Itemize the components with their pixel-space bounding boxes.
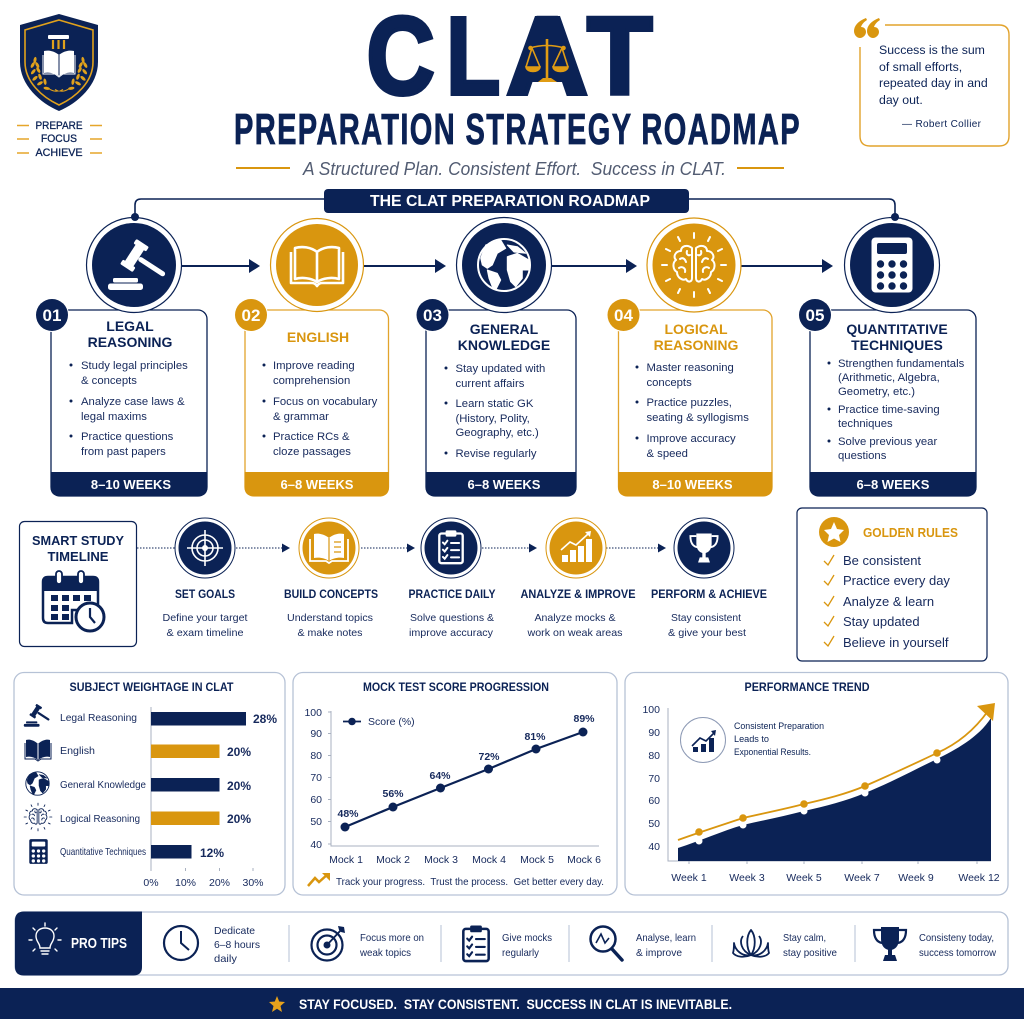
roadmap banner: THE CLAT PREPARATION ROADMAP [370,193,650,210]
timeline step: perform and achieve [651,518,767,639]
bar chart: Logical Reasoning [60,813,140,825]
bullet list: Practice questions [81,431,174,443]
bullet list: Focus on vocabulary [273,396,378,408]
timeline step: analyze and improve: Analyze mocks & [534,612,616,624]
line chart: Mock 5 [520,854,554,866]
area chart: 80 [648,750,660,762]
bar chart: 12% [200,846,224,860]
bar chart: 30% [242,877,264,889]
icon: gavel [86,213,182,312]
checklist: Be consistent [843,553,921,568]
line chart: Mock 4 [472,854,506,866]
callout: growth note [680,718,824,762]
card title [88,318,172,350]
footer banner [0,988,1024,1019]
timeline connectors [137,544,666,552]
badge: 03 [416,298,450,332]
checklist: Stay updated [843,614,920,629]
panel: mock test score progression [293,672,617,895]
bullet list: Practice time-saving [838,404,940,416]
area chart: 70 [648,773,660,785]
bar chart: 20% [227,812,251,826]
bullet list: Strengthen fundamentals [838,358,965,370]
timeline step: practice daily: Solve questions & [410,612,494,624]
tip: weak topics: Focus more on [360,932,424,944]
tip: daily hours [164,925,260,965]
bar chart: 10% [175,877,196,889]
card title: REASONING [654,337,738,353]
timeline step: practice daily [408,518,496,639]
bullet list: & concepts [81,375,137,387]
line chart: 81% [524,731,546,743]
card title: KNOWLEDGE [458,337,550,353]
area chart: 100 [642,704,660,716]
footer: duration [426,472,576,496]
area chart: Week 3 [729,872,765,884]
icon: checklist [421,518,481,578]
tip: calm: stay positive [783,947,837,959]
bullet list [828,358,965,462]
bullet list: (History, Polity, [456,413,530,425]
badge: 04: 04 [614,306,633,325]
tip: calm [733,930,837,959]
panel: english [244,310,389,496]
badge: 05 [798,298,832,332]
bullet list [636,362,749,460]
panel: subject weightage [14,672,285,895]
line chart: 72% [478,751,500,763]
footer: duration [810,472,976,496]
logo: shield crest with motto [17,14,102,159]
icon: globe [456,218,552,312]
icon: target [175,518,235,578]
motto [17,120,102,159]
card title [846,321,948,353]
line chart [304,707,601,866]
area chart: Week 9 [898,872,934,884]
bar chart: 20% [227,779,251,793]
panel: quantitative techniques [810,310,976,496]
timeline step: set goals: Define your target [162,612,248,624]
subject icons [24,704,53,864]
checklist: Believe in yourself [843,635,949,650]
line chart: 100 [304,707,322,719]
line chart: 48% [337,808,359,820]
bullet list: Study legal principles [81,360,188,372]
tip: consistency [874,927,996,961]
footer: duration: 8–10 WEEKS [91,477,171,492]
line chart: 40 [310,839,322,851]
timeline step: analyze and improve: ANALYZE & IMPROVE [520,589,636,601]
panel: golden rules [797,508,987,661]
tip: daily hours: Dedicate [214,925,255,937]
card title [458,321,550,353]
footer: duration [50,472,208,496]
line chart: 90 [310,728,322,740]
bullet list: cloze passages [273,446,351,458]
area chart: 90 [648,727,660,739]
bullet list: Improve accuracy [646,433,736,445]
panel: performance trend [625,672,1008,895]
badge: 03: 03 [423,306,442,325]
bullet list: Master reasoning [646,362,734,374]
area chart [642,703,1000,884]
bullet list: legal maxims [81,411,147,423]
icon: scales of justice [526,39,568,82]
footer: duration [618,472,772,496]
tip: weak topics: weak topics [359,947,411,959]
line chart: 50 [310,816,322,828]
bullet list: concepts [646,377,692,389]
motto: FOCUS [41,133,77,145]
area chart: Week 7 [844,872,880,884]
line chart: 80 [310,750,322,762]
bullet list: current affairs [456,378,525,390]
icon: trophy [674,518,734,578]
footer: duration: 8–10 WEEKS [652,477,733,492]
bullet list: Stay updated with [456,363,545,375]
callout: growth note: Leads to [734,734,769,744]
badge: 02 [234,298,268,332]
badge: 01 [35,298,69,332]
panel: smart study timeline: SMART STUDY [32,533,124,548]
tip: calm: Stay calm, [783,932,826,944]
badge: 02: 02 [242,306,260,325]
icon: calendar and clock [43,571,104,631]
bullet list: Analyze case laws & [81,396,185,408]
panel: performance trend: PERFORMANCE TREND [744,682,870,694]
card title: GENERAL [470,321,539,337]
area chart: Week 1 [671,872,707,884]
timeline step: build concepts: & make notes [298,627,362,639]
bullet list: questions [838,450,887,462]
title: CLAT [366,0,652,118]
timeline step: practice daily: improve accuracy [409,627,494,639]
card title: LEGAL [106,318,154,334]
icon: growth chart [546,518,606,578]
line chart: Mock 6 [567,854,601,866]
area chart: Week 12 [958,872,1000,884]
bullet list: Revise regularly [456,448,537,460]
footer: duration: 6–8 WEEKS [468,477,541,492]
panel: mock test score progression: MOCK TEST SCORE PROGRESSION [363,682,549,694]
bar chart: General Knowledge [60,779,146,791]
tip: mocks: Give mocks [502,932,552,944]
icon: star badge [819,517,849,547]
checklist: Analyze & learn [843,594,934,609]
bullet list: seating & syllogisms [646,412,749,424]
panel: smart study timeline: TIMELINE [48,549,109,564]
icon: brain [647,218,741,312]
line chart: Mock 3 [424,854,458,866]
line chart: Mock 1 [329,854,363,866]
bullet list: techniques [838,418,893,430]
footer note: Track your progress. Trust the process. Get better every day. [336,876,604,888]
timeline step: analyze and improve [520,518,636,639]
area chart: Week 5 [786,872,822,884]
area chart: 60 [648,795,660,807]
footer: duration [244,472,389,496]
card title: QUANTITATIVE [846,321,948,337]
bullet list: Improve reading [273,360,355,372]
card title: ENGLISH [287,329,349,345]
tip: analyse [590,926,696,960]
timeline step: build concepts: Understand topics [287,612,373,624]
bar chart: 20% [209,877,230,889]
bullet list [444,363,545,460]
bullet list: comprehension [273,375,350,387]
bar chart [60,707,277,889]
panel: general knowledge [426,310,576,496]
checklist [824,553,950,650]
panel: logical reasoning [618,310,772,496]
card title: TECHNIQUES [851,337,943,353]
bar chart: 0% [143,877,159,889]
bar chart: Quantitative Techniques [60,846,146,858]
line chart: 60 [310,794,322,806]
tip: daily hours: 6–8 hours [214,939,260,951]
callout: quote: repeated day in and [879,76,988,90]
timeline step: perform and achieve: & give your best [668,627,746,639]
bar chart: Legal Reasoning [60,712,137,724]
callout: quote: Success is the sum [879,43,985,57]
tip: analyse: Analyse, learn [636,932,696,944]
heading: preparation strategy roadmap: PREPARATION STRATEGY ROADMAP [234,104,800,153]
legend: Score (%) [368,716,415,728]
line chart: 89% [573,713,595,725]
line chart: 56% [382,788,404,800]
bullet list: (Arithmetic, Algebra, [838,372,940,384]
tip: weak topics [312,926,424,960]
pro tips label: PRO TIPS [71,935,127,952]
bullet list: Geometry, etc.) [838,386,915,398]
bullet list [70,360,188,458]
callout: quote: — Robert Collier [902,119,982,130]
bullet list: from past papers [81,446,166,458]
bar chart: English [60,745,95,757]
roadmap banner [135,189,895,217]
line chart: 70 [310,772,322,784]
tip: mocks: regularly [502,947,540,959]
motto: PREPARE [36,120,82,132]
timeline step: build concepts [284,518,378,639]
badge: 04 [606,298,640,332]
timeline step: set goals: & exam timeline [166,627,244,639]
subtitle: A Structured Plan. Consistent Effort. Success in CLAT. [302,159,726,179]
callout: growth note: Consistent Preparation [734,721,824,731]
line chart: 64% [429,770,451,782]
badge: 05: 05 [806,306,824,325]
timeline step: build concepts: BUILD CONCEPTS [284,589,378,601]
callout: quote [854,18,1009,146]
panel: golden rules: GOLDEN RULES [863,525,958,540]
timeline step: perform and achieve: PERFORM & ACHIEVE [651,589,767,601]
tip: consistency: success tomorrow [919,947,996,959]
timeline step: analyze and improve: work on weak areas [526,627,622,639]
timeline step: practice daily: PRACTICE DAILY [408,589,496,601]
icon: star [269,996,285,1012]
card title: LOGICAL [664,321,728,337]
badge: 01: 01 [43,306,61,325]
panel: subject weightage: SUBJECT WEIGHTAGE IN CLAT [70,682,234,694]
bullet list: Practice RCs & [273,431,350,443]
line chart: Mock 2 [376,854,410,866]
motto: ACHIEVE [36,147,82,159]
footer: duration: 6–8 WEEKS [281,477,354,492]
area chart: 50 [648,818,660,830]
timeline step: perform and achieve: Stay consistent [671,612,741,624]
bullet list: & speed [646,448,688,460]
icon: book with notes [299,518,359,578]
bullet list: & grammar [273,411,329,423]
arrows between subjects [182,259,833,273]
icon: calculator [844,213,940,312]
callout: quote: of small efforts, [879,60,962,74]
legend [343,716,415,728]
panel: legal reasoning [50,310,208,496]
icon: open book [270,218,364,312]
footer note [308,873,604,888]
callout: quote: day out. [879,93,923,107]
card title: REASONING [88,334,172,350]
tip: consistency: Consisteny today, [919,932,994,944]
area chart: 40 [648,841,660,853]
panel: smart study timeline [20,522,136,646]
bullet list: Practice puzzles, [646,397,732,409]
bullet list: Learn static GK [456,398,534,410]
checklist: Practice every day [843,573,950,588]
bar chart: 20% [227,745,251,759]
card title [654,321,738,353]
footer banner: STAY FOCUSED. STAY CONSISTENT. SUCCESS IN CLAT IS INEVITABLE. [299,997,732,1012]
tip: daily hours: daily [214,953,238,965]
bar chart: 28% [253,712,277,726]
footer: duration: 6–8 WEEKS [857,477,930,492]
icon: shield [20,14,98,111]
bullet list: Geography, etc.) [456,427,539,439]
callout: growth note: Exponential Results. [734,747,811,757]
panel: pro tips [15,912,1008,976]
timeline step: set goals: SET GOALS [175,589,235,601]
bullet list: Solve previous year [838,436,937,448]
tip: mocks [463,925,552,961]
timeline step: set goals [162,518,248,639]
tip: analyse: & improve [636,947,682,959]
pro tips label [15,912,142,976]
bullet list [262,360,378,458]
